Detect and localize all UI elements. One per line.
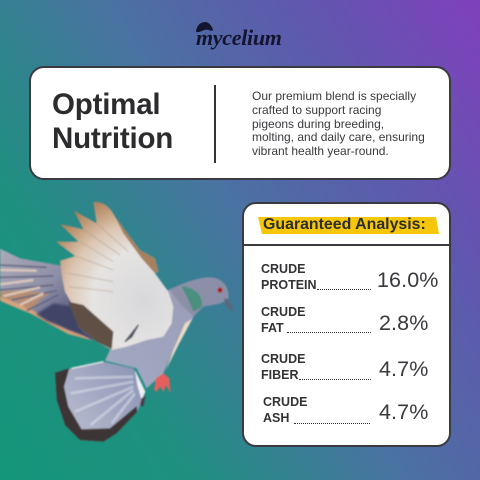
row: crude ash: 4.7%	[379, 400, 428, 424]
illustration: flying pigeon	[0, 201, 233, 442]
row: crude fiber: CRUDE	[261, 352, 305, 366]
description text: Our premium blend is specially	[252, 89, 416, 103]
row: crude ash: ASH	[263, 410, 289, 424]
row: crude fat: 2.8%	[379, 311, 428, 335]
heading: Nutrition	[52, 122, 173, 155]
heading highlight	[258, 217, 439, 234]
body	[105, 290, 200, 388]
description text	[252, 89, 425, 158]
description text: pigeons during breeding,	[252, 117, 384, 131]
panel: optimal nutrition	[29, 66, 451, 180]
row: crude protein	[261, 262, 438, 292]
eye	[217, 287, 223, 293]
logo: mycelium	[196, 22, 282, 50]
row: crude protein: CRUDE	[261, 262, 305, 276]
row: crude ash	[263, 395, 428, 424]
divider line	[214, 85, 216, 163]
description text: crafted to support racing	[252, 103, 381, 117]
row: crude fat: CRUDE	[261, 305, 305, 319]
row: crude ash: CRUDE	[263, 395, 307, 409]
row: crude fat	[261, 305, 428, 335]
row: crude fat: FAT	[261, 320, 284, 334]
heading: Guaranteed Analysis:	[263, 216, 426, 233]
icon: mushroom cap	[196, 22, 213, 32]
near wing	[56, 202, 173, 350]
description text: vibrant health year-round.	[252, 144, 389, 158]
row: crude protein: 16.0%	[377, 268, 438, 292]
row: crude fiber	[261, 352, 428, 382]
beak	[224, 298, 233, 312]
foot	[154, 373, 171, 393]
header rule	[244, 244, 449, 246]
row: crude fiber: 4.7%	[379, 357, 428, 381]
row: crude protein: PROTEIN	[261, 278, 317, 292]
tail	[55, 362, 146, 442]
panel: guaranteed analysis	[242, 202, 451, 447]
heading: Optimal	[52, 88, 160, 121]
far wing	[0, 249, 93, 341]
logo wordmark: mycelium	[196, 25, 282, 50]
head and neck	[169, 277, 229, 317]
row: crude fiber: FIBER	[261, 368, 298, 382]
heading	[52, 88, 173, 155]
description text: molting, and daily care, ensuring	[252, 130, 425, 144]
